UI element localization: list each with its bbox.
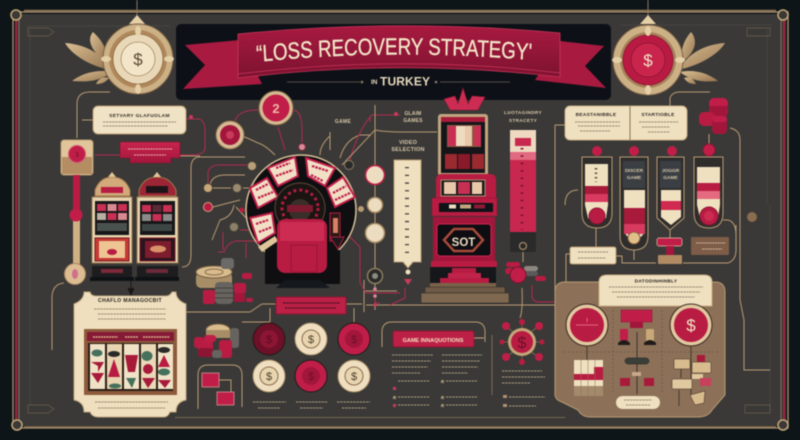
node: lever box: 3 (75, 152, 79, 159)
panel: management (74, 292, 186, 417)
node: lever box (61, 140, 93, 284)
coins: two by three: $ (308, 334, 314, 346)
red label (120, 142, 180, 163)
chips: near strategy bar (505, 262, 546, 283)
panel: two-column card (565, 106, 687, 140)
wheel (246, 155, 356, 265)
text block: burst notes (502, 371, 545, 407)
note card (570, 247, 616, 264)
panel: brown analytics: DATODINHINBLY (635, 278, 678, 284)
circles: right of wheel (366, 166, 384, 307)
label: games: GAMES (403, 118, 423, 124)
chart: video scale (394, 160, 421, 285)
panel: budget card: SETVARY GLAFUOLAM (109, 113, 170, 119)
icon: left medal: $ (133, 50, 143, 69)
label: strategy: STRACETY (509, 118, 538, 124)
label: video selection (391, 140, 425, 153)
panel: management: CHAFLO MANAGOCBIT (98, 298, 162, 304)
coins: two by three: $ (266, 334, 272, 346)
tube: four (694, 144, 723, 228)
coins: two by three: $ (308, 371, 314, 383)
slot machine: left (90, 172, 134, 281)
panel: brown analytics (555, 275, 725, 417)
small flow boxes (198, 365, 242, 409)
panel: header (176, 24, 611, 100)
icon: right medal (612, 15, 725, 95)
coins: two by three: $ (266, 371, 272, 383)
arrow (128, 280, 134, 295)
title ribbon (182, 24, 606, 90)
small nodes (189, 112, 398, 232)
red bar label (276, 297, 346, 314)
circle: number two: 2 (272, 101, 280, 116)
coins: two by three: $ (351, 334, 357, 346)
circle: node (216, 121, 244, 149)
chips: top right (699, 98, 728, 134)
stool (265, 219, 340, 288)
panel: two-column card: STARTIOBLE (641, 112, 675, 118)
slot machine: centre: SOT (452, 237, 475, 249)
label: game: GAME (335, 119, 351, 125)
panel: budget card (93, 106, 186, 134)
connector block (657, 238, 682, 264)
subtitle: IN (371, 79, 378, 86)
chart: strategy bar (510, 130, 536, 252)
circle: number two (259, 91, 293, 125)
label: games (403, 111, 423, 124)
label: games: GLAIM (404, 111, 422, 117)
panel: brown analytics: $ (686, 316, 696, 335)
panel: game instructions (382, 322, 492, 407)
coins: two by three (253, 323, 370, 392)
slot machine: centre (421, 88, 509, 303)
label: strategy (504, 110, 542, 124)
title ribbon: “LOSS RECOVERY STRATEGY' (256, 37, 532, 62)
icon: dollar burst (500, 319, 544, 365)
label: strategy: LUOTAGINDRY (504, 110, 542, 116)
coins: two by three: $ (351, 371, 357, 383)
slot machine: right (135, 172, 179, 281)
chips: lower stack (194, 324, 239, 358)
chips: large stack (196, 258, 253, 304)
panel: game instructions: GAME INNAQUOTIONS (403, 338, 464, 344)
label: video selection: SELECTION (391, 147, 425, 153)
icon: dollar burst: $ (518, 335, 527, 352)
tube: two: GAME (627, 175, 642, 181)
icon: right medal: $ (643, 51, 653, 70)
tube: two: DISCER (625, 168, 644, 174)
tube: three: GAME (663, 175, 678, 181)
panel: two-column card: BEASTANIBBLE (576, 112, 617, 118)
coin captions (253, 402, 370, 408)
tube: three (657, 146, 684, 230)
label: video selection: VIDEO (399, 140, 418, 146)
subtitle (287, 74, 510, 88)
tube: two (620, 146, 648, 250)
connectors: centre network (52, 92, 770, 370)
tube: one (582, 146, 612, 228)
icon: left medal (65, 15, 174, 94)
brown label (691, 237, 729, 255)
coin: tan decor (747, 212, 757, 222)
tube: three: JOGGR (662, 168, 680, 174)
subtitle: TURKEY (380, 74, 430, 88)
